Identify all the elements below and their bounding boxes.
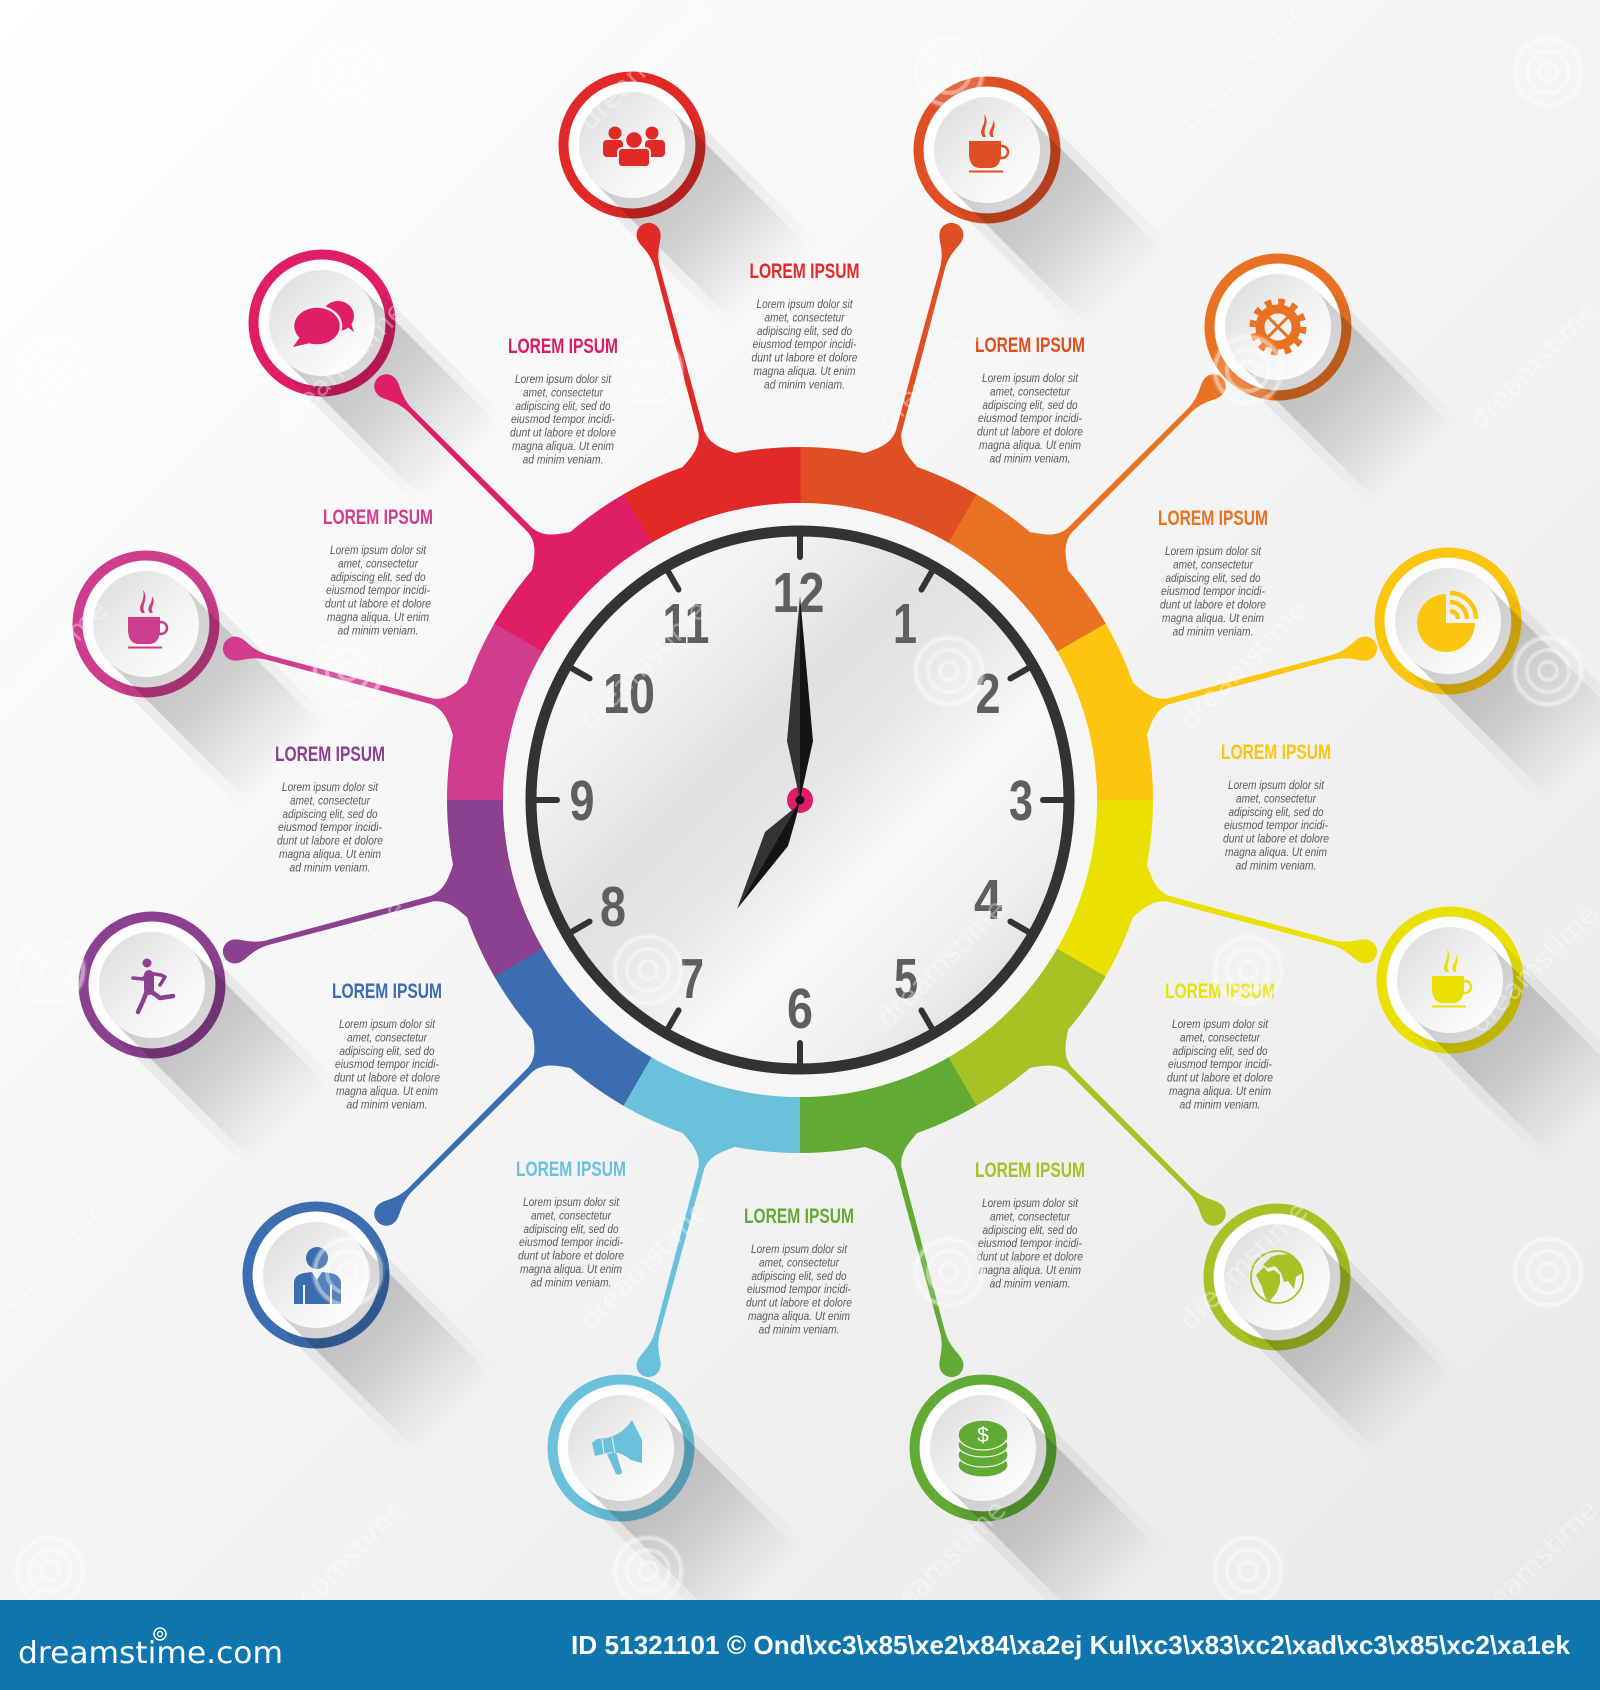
text block: orange-red: magna aliqua. Ut enim [979,438,1081,452]
text block: red: adipiscing elit, sed do [757,324,852,338]
text block: orange: magna aliqua. Ut enim [1162,611,1264,625]
text block: yellow: LOREM IPSUM [1221,741,1331,764]
text block: lemon: adipiscing elit, sed do [1172,1044,1268,1058]
text block: orange-red: dunt ut labore et dolore [977,425,1083,439]
text block: orange-red [975,334,1085,465]
connector 1 [864,216,981,471]
footer credit: ID 51321101 © Ond\xc3\x85\xe2\x84\xa2ej Kul\xc3\x83\xc2\xad\xc3\x85\xc2\xa1ek [571,1630,1571,1660]
node: orange-red coffee [918,82,1177,340]
watermark: diagonal text: dreamstime [270,294,412,436]
icon: coffee cup [969,114,1008,172]
icon: businessman [294,1247,341,1304]
clock numerals: 12 [772,561,824,625]
text block: cyan: dunt ut labore et dolore [518,1249,624,1263]
text block: orange-red: adipiscing elit, sed do [982,398,1078,412]
text block: yellow: eiusmod tempor incidi- [1224,818,1328,832]
text block: orange: dunt ut labore et dolore [1160,598,1266,612]
panel: colour ring [356,356,1244,1244]
footer bar [0,1600,1600,1690]
text block: orange-red: eiusmod tempor incidi- [978,411,1082,425]
icon: runner [133,958,173,1012]
node: orange gear [1210,258,1468,517]
clock numerals: 10 [603,662,655,726]
text block: lime: adipiscing elit, sed do [982,1223,1078,1237]
text block: orange: amet, consectetur [1173,557,1254,571]
text block: blue: dunt ut labore et dolore [334,1071,440,1085]
text block: lime: Lorem ipsum dolor sit [982,1196,1079,1210]
text block: cyan: Lorem ipsum dolor sit [523,1195,620,1209]
text block: orange: eiusmod tempor incidi- [1161,584,1265,598]
clock numerals: 8 [600,875,626,939]
text block: lime [975,1159,1085,1290]
connector 6 [864,1129,981,1384]
clock numerals: 4 [974,868,1002,932]
clock numerals: 6 [787,977,813,1041]
watermark: diagonal text: dreamstime [270,1493,412,1635]
text block: purple: eiusmod tempor incidi- [278,820,382,834]
icon: coins [958,1420,1008,1477]
connector 3 [1129,619,1384,736]
text block: lemon: ad minim veniam. [1180,1097,1260,1111]
text block: green: magna aliqua. Ut enim [748,1309,850,1323]
text block: blue: LOREM IPSUM [332,980,442,1003]
text block: lime: LOREM IPSUM [975,1159,1085,1182]
text block: orange: adipiscing elit, sed do [1166,571,1261,585]
connector 9 [216,864,471,981]
icon: globe [1251,1251,1303,1303]
node: lemon coffee [1382,912,1600,1170]
text block: lime: amet, consectetur [990,1209,1071,1223]
text block: magenta: magna aliqua. Ut enim [327,610,429,624]
text block: orange-red: ad minim veniam. [990,451,1070,465]
text block: lemon [1165,980,1275,1111]
text block: blue [332,980,442,1111]
text block: lemon: magna aliqua. Ut enim [1169,1084,1271,1098]
watermark: diagonal text: dreamstime [572,1194,714,1336]
icon: megaphone [592,1420,642,1475]
text block: cyan: amet, consectetur [531,1208,612,1222]
text block: orange [1158,507,1268,638]
node: lime globe [1208,1208,1467,1467]
text block: orange-red: LOREM IPSUM [975,334,1085,357]
connector 7 [619,1129,736,1384]
connector 4 [1129,864,1384,981]
text block: green: adipiscing elit, sed do [752,1269,847,1283]
icon: pie chart with signal arcs [1417,593,1476,652]
text block: crimson: dunt ut labore et dolore [510,426,616,440]
text block: crimson: Lorem ipsum dolor sit [515,372,612,386]
text block: red: amet, consectetur [764,310,845,324]
text block: cyan: ad minim veniam. [530,1275,612,1289]
panel: connectors [216,216,1384,1384]
text block: orange-red: Lorem ipsum dolor sit [982,371,1079,385]
text block: red: ad minim veniam. [764,377,845,391]
text block: lime: dunt ut labore et dolore [977,1250,1083,1264]
text block: cyan: eiusmod tempor incidi- [519,1235,623,1249]
text block: red: eiusmod tempor incidi- [752,337,856,351]
connector 10 [216,619,471,736]
text block: red: LOREM IPSUM [750,260,860,283]
text block: blue: Lorem ipsum dolor sit [339,1017,436,1031]
node: cyan megaphone [552,1380,811,1638]
connector 11 [359,359,573,573]
text block: cyan: adipiscing elit, sed do [524,1222,619,1236]
text block: crimson: eiusmod tempor incidi- [511,412,615,426]
text block: purple: adipiscing elit, sed do [282,807,378,821]
clock bezel gap [503,503,1097,1097]
connector 5 [1027,1027,1241,1241]
watermark: diagonal text: dreamstime [870,294,1012,436]
text block: green: LOREM IPSUM [744,1205,854,1228]
watermark: diagonal text: dreamstime [870,1493,1012,1635]
text block: crimson: adipiscing elit, sed do [516,399,611,413]
text block: blue: eiusmod tempor incidi- [335,1057,439,1071]
text block: magenta: Lorem ipsum dolor sit [330,543,427,557]
text block: yellow [1221,741,1331,872]
node: purple runner [84,916,342,1175]
node: green coins [914,1380,1173,1638]
text block: purple: magna aliqua. Ut enim [279,847,381,861]
text block: lemon: dunt ut labore et dolore [1167,1071,1273,1085]
text block: lime: eiusmod tempor incidi- [978,1236,1082,1250]
clock numerals: 11 [662,592,710,656]
text block: magenta [323,506,433,637]
text block: yellow: amet, consectetur [1236,791,1317,805]
text block: purple [275,743,385,874]
text block: crimson: LOREM IPSUM [508,335,618,358]
text block: green: Lorem ipsum dolor sit [751,1242,848,1256]
text block: lemon: Lorem ipsum dolor sit [1172,1017,1269,1031]
watermark: diagonal text: dreamstime [1172,593,1314,735]
text block: yellow: magna aliqua. Ut enim [1225,845,1327,859]
icon: coffee cup [1432,949,1471,1008]
text block: cyan: LOREM IPSUM [516,1158,626,1181]
text block: green: eiusmod tempor incidi- [747,1282,851,1296]
text block: yellow: ad minim veniam. [1236,858,1316,872]
connector 8 [359,1027,573,1241]
text block: green: amet, consectetur [759,1255,840,1269]
minute hand [787,596,813,800]
text block: crimson: amet, consectetur [523,385,604,399]
text block: crimson [508,335,618,466]
text block: magenta: amet, consectetur [338,556,419,570]
footer logo: dreamstime.com [18,1636,283,1671]
text block: purple: LOREM IPSUM [275,743,385,766]
text block: lime: ad minim veniam. [990,1276,1070,1290]
hour hand [737,800,800,909]
node: blue businessman [248,1206,506,1465]
icon: people [603,126,665,167]
text block: red: magna aliqua. Ut enim [754,364,856,378]
text block: orange-red: amet, consectetur [990,384,1071,398]
text block: cyan: magna aliqua. Ut enim [520,1262,622,1276]
text block: lemon: LOREM IPSUM [1165,980,1275,1003]
text block: magenta: dunt ut labore et dolore [325,597,431,611]
text block: magenta: adipiscing elit, sed do [330,570,426,584]
text block: magenta: LOREM IPSUM [323,506,433,529]
text block: orange: ad minim veniam. [1172,624,1254,638]
clock numerals: 1 [893,592,917,656]
clock [503,503,1097,1097]
clock numerals: 9 [570,769,594,833]
clock numerals: 2 [976,662,1000,726]
text block: green [744,1205,854,1336]
center pin [787,787,813,813]
node: magenta coffee [78,556,336,814]
hour ticks [536,536,1064,1064]
text block: blue: adipiscing elit, sed do [340,1044,435,1058]
icon: coins: $ [977,1424,989,1447]
text block: purple: dunt ut labore et dolore [277,834,383,848]
connector 2 [1027,359,1241,573]
watermark: diagonal text: dreamstime [870,892,1012,1034]
text block: red: dunt ut labore et dolore [752,351,858,365]
text block: blue: ad minim veniam. [346,1097,428,1111]
text block: blue: magna aliqua. Ut enim [336,1084,438,1098]
text block: red [750,260,860,391]
text block: yellow: dunt ut labore et dolore [1223,832,1329,846]
text block: lemon: amet, consectetur [1180,1030,1261,1044]
text block: cyan [516,1158,626,1289]
clock numerals: 7 [680,947,704,1011]
clock numerals: 3 [1009,769,1033,833]
text block: purple: ad minim veniam. [290,860,370,874]
clock numerals [570,561,1033,1041]
text block: yellow: adipiscing elit, sed do [1228,805,1324,819]
text block: magenta: ad minim veniam. [338,623,418,637]
icon: coffee cup [128,590,167,648]
text block: green: ad minim veniam. [758,1322,840,1336]
text block: lime: magna aliqua. Ut enim [979,1263,1081,1277]
text block: lemon: eiusmod tempor incidi- [1168,1057,1272,1071]
text block: purple: amet, consectetur [290,793,371,807]
text block: yellow: Lorem ipsum dolor sit [1228,778,1325,792]
text block: crimson: magna aliqua. Ut enim [512,439,614,453]
icon: speech bubbles [293,301,354,347]
text block: crimson: ad minim veniam. [522,452,604,466]
text block: magenta: eiusmod tempor incidi- [326,583,430,597]
node: crimson speech bubbles [254,254,512,513]
text block: purple: Lorem ipsum dolor sit [282,780,379,794]
node: red people [564,76,822,335]
clock numerals: 5 [894,947,918,1011]
icon: gear [1253,302,1303,352]
center pin core [796,796,804,804]
watermark: diagonal text: dreamstime [572,593,714,735]
connector 12 [619,216,736,471]
text block: orange: Lorem ipsum dolor sit [1165,544,1262,558]
watermark: diagonal text: dreamstime [1172,1194,1314,1336]
node: yellow pie chart [1380,552,1600,811]
text block: red: Lorem ipsum dolor sit [756,297,853,311]
text block: blue: amet, consectetur [347,1030,428,1044]
text block: orange: LOREM IPSUM [1158,507,1268,530]
watermark: diagonal text: dreamstime [270,892,412,1034]
clock face [531,531,1069,1069]
text block: green: dunt ut labore et dolore [746,1296,852,1310]
